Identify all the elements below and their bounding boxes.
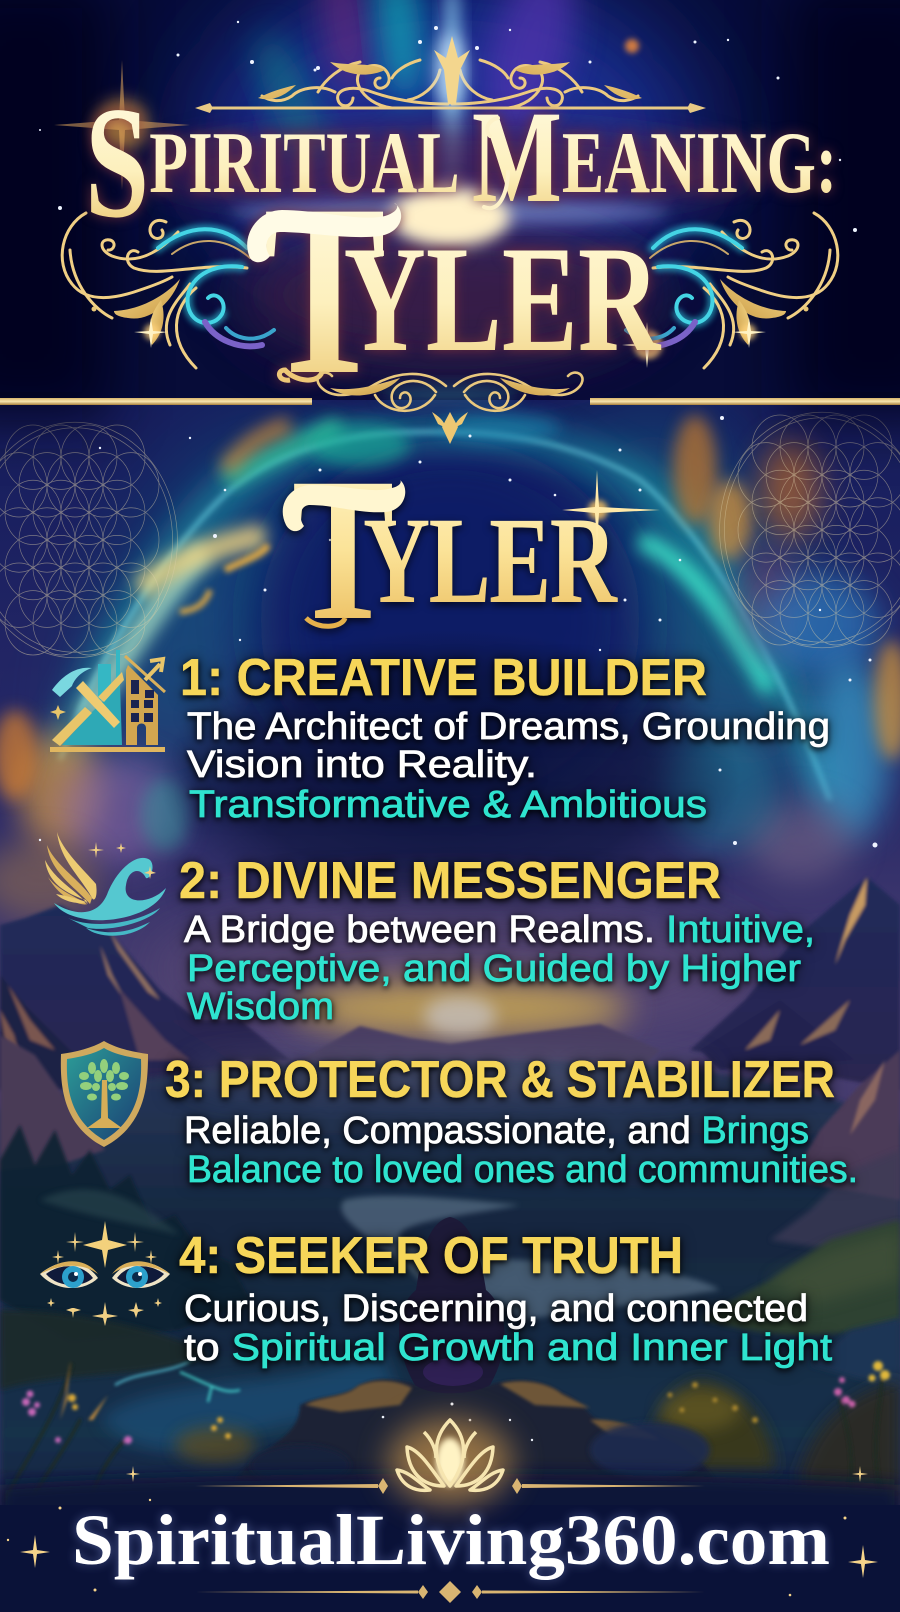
bushes [640,1380,775,1470]
nebula aurora arch [0,394,900,930]
bottom ornament with gold divider [0,373,900,444]
item 1: creative builder: Transformative & Ambitious [189,784,707,826]
description 1: The Architect of Dreams, Grounding [187,706,830,748]
title: Spiritual Meaning: S [85,73,149,251]
river [341,1196,720,1320]
valley landscape [0,1035,900,1612]
heading 1: 1: CREATIVE BUILDER [180,649,707,707]
title swirl ornaments [62,213,838,368]
item 4: seeker of truth [40,1221,832,1369]
flowers [5,1360,890,1500]
divider under lotus [195,1478,705,1494]
glow under top divider [310,414,560,467]
icon: wing and wave [45,832,166,936]
title: Tyler [247,154,662,425]
top ornament [195,34,706,113]
footer sparkles [7,1466,878,1596]
icon: building with hammer [50,650,165,752]
item 3: protector and stabilizer [61,1041,858,1191]
side mountain slopes [0,1035,105,1170]
bottom ornament [195,1581,705,1603]
description 4: Curious, Discerning, and connected [184,1288,808,1330]
swash on title M [484,118,508,208]
website: SpiritualLiving360.com [72,1500,830,1580]
item 2: divine messenger [45,832,815,1028]
heading 4: 4: SEEKER OF TRUTH [179,1227,683,1285]
rock [235,1379,715,1491]
item 2: divine messenger: Perceptive, and Guided by Higher [187,948,801,990]
flare on name [562,470,660,545]
item 3: protector and stabilizer: Balance to loved ones and communities. [187,1149,858,1191]
icon: two eyes and stars [40,1221,170,1326]
title: Spiritual Meaning: M [472,83,562,230]
icon: shield with tree [61,1041,148,1147]
forest silhouettes [0,1125,250,1340]
heading 3: 3: PROTECTOR & STABILIZER [165,1051,835,1109]
description 2: A Bridge between Realms. Intuitive, [184,909,815,951]
item 1: creative builder [50,649,830,826]
flower of life patterns [0,412,900,658]
title: Tyler: YLER [344,215,662,384]
item 2: divine messenger: Wisdom [187,986,334,1028]
horizon glow and mountains [0,877,900,1090]
title: Spiritual Meaning: PIRITUAL [149,115,472,212]
heading 2: 2: DIVINE MESSENGER [179,852,721,910]
seated figure [399,1217,505,1393]
name heading Tyler: T [292,437,394,663]
top title panel [0,0,900,420]
item 1: creative builder: Vision into Reality. [187,744,537,786]
description 3: Reliable, Compassionate, and Brings [184,1110,809,1152]
name heading Tyler [283,437,618,663]
icon: glowing lotus [388,1418,512,1506]
item 4: seeker of truth: to Spiritual Growth and Inner Light [184,1327,832,1369]
name heading Tyler: YLER [363,491,618,629]
dark footer band [0,1474,900,1612]
title: Tyler: T [263,154,386,425]
